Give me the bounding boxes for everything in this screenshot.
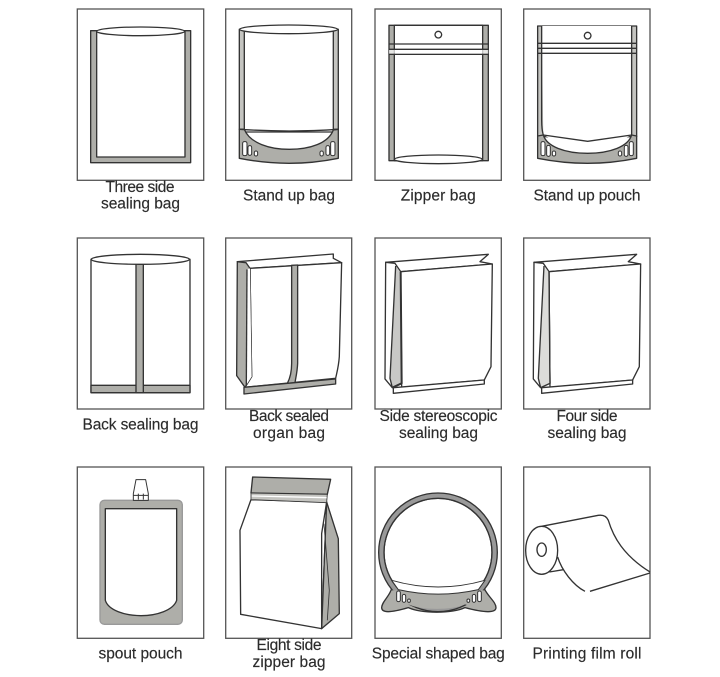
icon: printing film roll: [526, 515, 650, 591]
icon: stand up pouch: [538, 26, 637, 163]
label: side stereoscopic sealing bag: sealing bag: [399, 425, 478, 442]
label: side stereoscopic sealing bag: [380, 408, 498, 442]
icon: back sealing bag: [91, 254, 190, 393]
label: three side sealing bag: sealing bag: [101, 196, 180, 212]
label: back sealed organ bag: Back sealed: [249, 408, 329, 425]
label: four side sealing bag: [548, 408, 626, 442]
panel: printing film roll: [524, 467, 650, 662]
panel: eight side zipper bag: [226, 467, 352, 671]
panel: special shaped bag: [372, 467, 505, 662]
label: printing film roll: Printing film roll: [532, 646, 642, 662]
panel: back sealing bag: [77, 238, 204, 434]
panel: four side sealing bag: [524, 238, 650, 442]
label: eight side zipper bag: zipper bag: [252, 654, 326, 671]
label: stand up pouch: Stand up pouch: [534, 188, 640, 204]
icon: stand up bag: [239, 25, 338, 163]
label: back sealed organ bag: [249, 408, 329, 442]
icon: three side sealing bag: [91, 27, 191, 163]
label: four side sealing bag: Four side: [556, 408, 618, 425]
label: back sealing bag: Back sealing bag: [82, 416, 198, 434]
panel: three side sealing bag: [77, 9, 204, 212]
panel: stand up pouch: [524, 9, 650, 204]
panel: spout pouch: [77, 467, 204, 662]
label: stand up bag: Stand up bag: [243, 188, 335, 204]
label: side stereoscopic sealing bag: Side stereoscopic: [380, 408, 498, 425]
icon: side stereoscopic sealing bag: [385, 254, 492, 393]
panel: side stereoscopic sealing bag: [375, 238, 501, 442]
icon: eight side zipper bag: [240, 477, 339, 629]
label: three side sealing bag: Three side: [106, 179, 174, 196]
label: special shaped bag: Special shaped bag: [372, 646, 505, 662]
panel: zipper bag: [375, 9, 501, 204]
label: eight side zipper bag: [252, 637, 326, 671]
label: eight side zipper bag: Eight side: [256, 637, 322, 654]
icon: zipper bag: [389, 25, 488, 164]
label: spout pouch: spout pouch: [98, 646, 182, 662]
label: zipper bag: Zipper bag: [401, 188, 476, 204]
panel: stand up bag: [226, 9, 352, 204]
icon: special shaped bag: [379, 493, 497, 612]
icon: spout pouch: [100, 480, 182, 624]
icon: back sealed organ bag: [237, 254, 342, 394]
label: back sealed organ bag: organ bag: [253, 425, 325, 442]
label: four side sealing bag: sealing bag: [548, 425, 626, 442]
icon: four side sealing bag: [533, 254, 641, 393]
label: three side sealing bag: [101, 179, 180, 212]
panel: back sealed organ bag: [226, 238, 352, 442]
